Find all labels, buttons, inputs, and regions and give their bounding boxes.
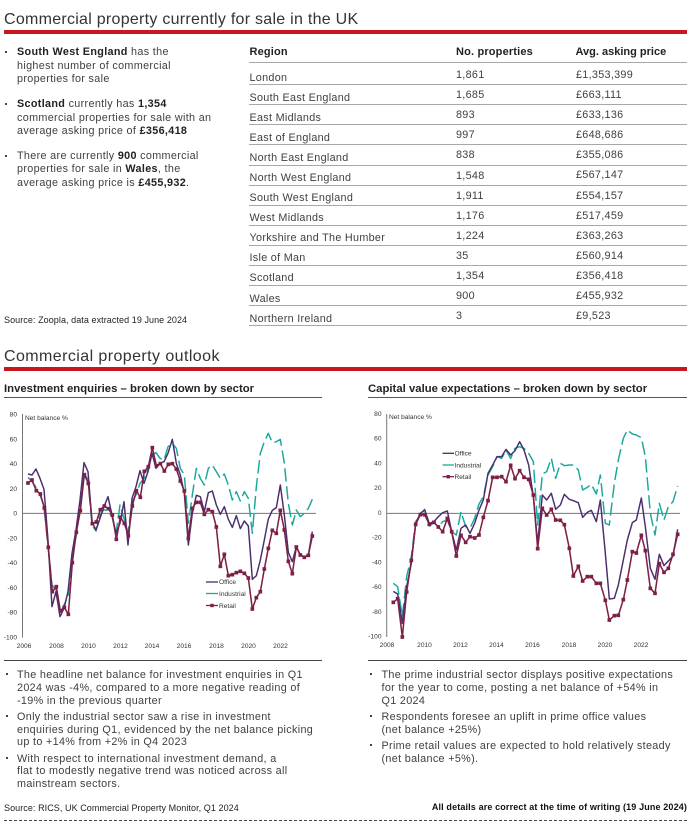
table: regions, properties and prices: Avg. asking price (576, 46, 666, 58)
table: regions, properties and prices: Isle of Man (250, 252, 306, 264)
line chart: investment enquiries: -60 (7, 585, 17, 592)
line chart: investment enquiries: 2010 (81, 643, 96, 650)
text block: investment enquiries commentary: With respect to international investment demand, a (17, 753, 277, 765)
table: regions, properties and prices: Wales (250, 293, 281, 305)
table: regions, properties and prices: £663,111 (576, 89, 622, 101)
line chart: investment enquiries: 0 (13, 511, 17, 518)
table: regions, properties and prices: 1,861 (456, 69, 485, 81)
line chart: capital value expectations (368, 411, 680, 649)
line chart: investment enquiries: Net balance % (25, 415, 68, 422)
legend: capital value expectations: Office (454, 450, 472, 458)
heading: commercial property for sale (4, 11, 687, 34)
line chart: capital value expectations: 60 (374, 436, 382, 443)
text block: capital value commentary: Respondents foresee an uplift in prime office values (382, 711, 647, 723)
line chart: capital value expectations: 80 (374, 411, 382, 418)
note: details correct at time of writing: All details are correct at the time of writing (19 June 2024) (432, 802, 687, 812)
text block: for-sale key points (5, 46, 211, 189)
table: regions, properties and prices: £356,418 (576, 270, 623, 282)
table: regions, properties and prices: London (250, 72, 287, 84)
legend: capital value expectations (442, 450, 482, 481)
line chart: capital value expectations: 40 (374, 460, 382, 468)
line chart: investment enquiries: -100 (4, 634, 17, 641)
table: regions, properties and prices: North East England (250, 152, 349, 164)
text block: capital value commentary: (net balance +5%). (382, 753, 478, 765)
text block: investment enquiries commentary: up to +14% from +2% in Q4 2023 (17, 736, 187, 748)
line chart: capital value expectations: 2020 (598, 642, 613, 649)
line chart: capital value expectations: -20 (372, 535, 382, 542)
table: regions, properties and prices: 35 (456, 250, 469, 262)
text block: capital value commentary (368, 660, 687, 765)
table: regions, properties and prices: 997 (456, 129, 475, 141)
line chart: investment enquiries: -20 (7, 535, 17, 542)
line chart: investment enquiries: 2006 (17, 643, 32, 650)
legend: investment enquiries: Retail (219, 603, 236, 610)
text block: investment enquiries commentary: Only the industrial sector saw a rise in investment (17, 711, 271, 723)
line chart: investment enquiries: 2022 (273, 643, 288, 650)
text block: capital value commentary: The prime industrial sector displays positive expectations (382, 669, 673, 681)
legend: capital value expectations: Retail (454, 474, 472, 481)
table: regions, properties and prices: West Midlands (250, 212, 324, 224)
line chart: investment enquiries: 40 (10, 461, 17, 468)
table: regions, properties and prices: South West England (250, 192, 353, 204)
line chart: investment enquiries: 20 (10, 486, 17, 493)
text block: investment enquiries commentary: 2024 was -4%, compared to a more negative reading of (17, 682, 301, 694)
line chart: investment enquiries: 60 (10, 436, 17, 443)
line chart: capital value expectations: Net balance % (389, 414, 432, 421)
heading: commercial property outlook: Commercial property outlook (4, 348, 220, 365)
table: regions, properties and prices (249, 46, 687, 326)
text block: investment enquiries commentary: -19% in the previous quarter (17, 695, 162, 707)
table: regions, properties and prices: 1,548 (456, 170, 485, 182)
table: regions, properties and prices: South East England (250, 92, 350, 104)
line chart: investment enquiries: -80 (7, 610, 17, 617)
text block: for-sale key points: properties for sale (17, 73, 110, 85)
text block: capital value commentary: for the year to come, posting a net balance of +54% in (382, 682, 658, 694)
table: regions, properties and prices: 838 (456, 149, 475, 161)
text block: for-sale key points: highest number of commercial (17, 60, 171, 72)
line chart: capital value expectations: 2012 (453, 642, 468, 649)
table: regions, properties and prices: £455,932 (576, 290, 623, 302)
text block: investment enquiries commentary (4, 660, 322, 790)
table: regions, properties and prices: North West England (250, 172, 351, 184)
table: regions, properties and prices: £560,914 (576, 250, 623, 262)
heading: commercial property for sale: Commercial property currently for sale in the UK (4, 11, 358, 28)
table: regions, properties and prices: 1,224 (456, 230, 485, 242)
line chart: investment enquiries: 2014 (145, 643, 160, 650)
line chart: capital value expectations: 0 (378, 510, 382, 517)
source: RICS: Source: RICS, UK Commercial Property Monitor, Q1 2024 (4, 803, 239, 813)
table: regions, properties and prices: Northern Ireland (250, 313, 332, 325)
line chart: capital value expectations: 2008 (380, 642, 395, 649)
line chart: capital value expectations: 2022 (634, 642, 649, 649)
text block: for-sale key points: properties for sale in Wales, the (17, 163, 181, 175)
line chart: investment enquiries: 2012 (113, 643, 128, 650)
table: regions, properties and prices: Scotland (250, 272, 294, 284)
table: regions, properties and prices: £355,086 (576, 149, 623, 161)
table: regions, properties and prices: East of England (250, 132, 330, 144)
line chart: capital value expectations: 20 (374, 485, 382, 492)
text block: capital value commentary: Prime retail values are expected to hold relatively steady (382, 740, 671, 752)
text block: investment enquiries commentary: The headline net balance for investment enquiries in Q1 (17, 669, 303, 681)
table: regions, properties and prices: £363,263 (576, 230, 623, 242)
text block: for-sale key points: average asking price is £455,932. (17, 177, 189, 189)
line chart: capital value expectations: 2014 (489, 642, 504, 649)
line chart: capital value expectations: -40 (372, 560, 382, 566)
line chart: capital value expectations: -60 (372, 584, 382, 591)
table: regions, properties and prices: £554,157 (576, 190, 623, 202)
line chart: investment enquiries: -40 (7, 560, 17, 567)
table: regions, properties and prices: 900 (456, 290, 475, 302)
line chart: capital value expectations: 2018 (562, 642, 577, 649)
line chart: investment enquiries: 2020 (241, 643, 256, 650)
source: Zoopla: Source: Zoopla, data extracted 19 June 2024 (4, 315, 187, 325)
line chart: investment enquiries: 80 (10, 412, 17, 419)
legend: investment enquiries: Industrial (219, 591, 246, 598)
table: regions, properties and prices: £648,686 (576, 129, 623, 141)
line chart: capital value expectations: 2016 (525, 642, 540, 649)
table: regions, properties and prices: 893 (456, 109, 475, 121)
table: regions, properties and prices: £517,459 (576, 210, 623, 222)
text block: investment enquiries commentary: enquiries during Q1, evidenced by the net balance picking (17, 724, 313, 736)
text block: for-sale key points: South West England has the (17, 46, 169, 58)
line chart: investment enquiries: 2008 (49, 643, 64, 650)
text block: for-sale key points: There are currently 900 commercial (17, 150, 199, 162)
table: regions, properties and prices: East Midlands (250, 112, 322, 124)
text block: investment enquiries commentary: flat to modestly negative trend was noticed across all (17, 765, 287, 777)
subheading: capital value expectations: Capital value expectations – broken down by sector (368, 383, 648, 395)
table: regions, properties and prices: £9,523 (576, 310, 611, 322)
line chart: investment enquiries: 2016 (177, 643, 192, 650)
heading: commercial property outlook (4, 348, 687, 371)
text block: for-sale key points: Scotland currently has 1,354 (17, 98, 167, 110)
table: regions, properties and prices: £567,147 (576, 169, 623, 181)
text block: investment enquiries commentary: mainstream sectors. (17, 778, 120, 790)
table: regions, properties and prices: 1,911 (456, 190, 484, 202)
table: regions, properties and prices: £1,353,399 (576, 69, 633, 81)
table: regions, properties and prices: Yorkshire and The Humber (250, 232, 385, 244)
text block: capital value commentary: Q1 2024 (382, 695, 425, 707)
table: regions, properties and prices: 1,176 (456, 210, 485, 222)
table: regions, properties and prices: 1,354 (456, 270, 485, 282)
legend: investment enquiries (206, 579, 246, 610)
table: regions, properties and prices: Region (250, 46, 288, 58)
line chart: capital value expectations: 2010 (417, 642, 432, 649)
line chart: investment enquiries: 2018 (209, 643, 224, 650)
subheading: investment enquiries: Investment enquiries – broken down by sector (4, 383, 255, 395)
table: regions, properties and prices: No. properties (456, 46, 533, 58)
table: regions, properties and prices: 1,685 (456, 89, 485, 101)
table: regions, properties and prices: £633,136 (576, 109, 623, 121)
line chart: capital value expectations: -80 (372, 609, 382, 616)
line chart: capital value expectations: -100 (368, 634, 382, 641)
table: regions, properties and prices: 3 (456, 310, 462, 322)
line chart: investment enquiries (4, 412, 316, 650)
text block: capital value commentary: (net balance +25%) (382, 724, 481, 736)
text block: for-sale key points: average asking price of £356,418 (17, 125, 187, 137)
text block: for-sale key points: commercial properties for sale with an (17, 112, 211, 124)
legend: capital value expectations: Industrial (454, 462, 482, 470)
legend: investment enquiries: Office (219, 579, 236, 586)
